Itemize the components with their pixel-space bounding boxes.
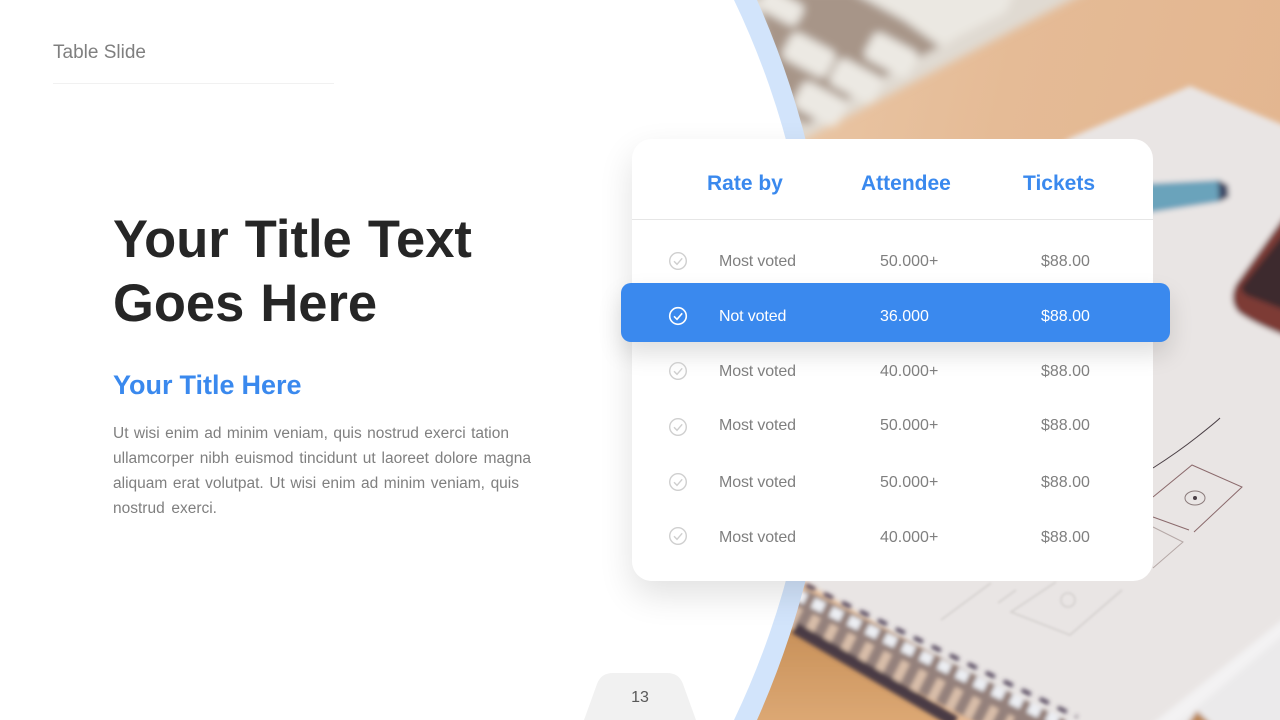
text: $88.00 <box>1041 417 1090 434</box>
text: Attendee <box>861 172 951 195</box>
phone <box>1232 208 1280 338</box>
body paragraph <box>113 425 531 517</box>
page number: 13 <box>631 689 649 706</box>
row 2 text: Not voted <box>719 308 786 325</box>
wireframe sketches on paper <box>941 418 1242 635</box>
text: $88.00 <box>1041 363 1090 380</box>
row 5 text: Most voted <box>719 474 796 491</box>
text: 36.000 <box>880 308 929 325</box>
table card <box>632 139 1153 581</box>
page number tab <box>584 673 696 720</box>
text: 40.000+ <box>880 529 938 546</box>
keyboard <box>720 0 1090 175</box>
body paragraph: Ut wisi enim ad minim veniam, quis nostrud exerci tation <box>113 425 509 442</box>
row 3 text: Most voted <box>719 363 796 380</box>
row 1 icon <box>669 252 687 270</box>
body paragraph: nostrud exerci. <box>113 500 217 517</box>
wood lower left <box>730 610 960 720</box>
table headers: Rate by <box>707 172 783 195</box>
row 6 icon <box>669 527 687 545</box>
text: $88.00 <box>1041 529 1090 546</box>
main title <box>113 210 472 333</box>
text: 40.000+ <box>880 363 938 380</box>
row 6 text: Most voted <box>719 529 796 546</box>
row 2 icon <box>668 306 688 326</box>
table card shadow <box>622 160 806 604</box>
table header divider <box>632 139 1153 220</box>
body paragraph: ullamcorper nibh euismod tincidunt ut laoreet dolore magna <box>113 450 531 467</box>
main title: Goes Here <box>113 274 377 333</box>
marker pen <box>1140 180 1228 214</box>
text: $88.00 <box>1041 308 1090 325</box>
text: $88.00 <box>1041 253 1090 270</box>
text: $88.00 <box>1041 474 1090 491</box>
highlighted row <box>621 283 1170 342</box>
text: Tickets <box>1023 172 1095 195</box>
row 4 icon <box>669 418 687 436</box>
body paragraph: aliquam erat volutpat. Ut wisi enim ad minim veniam, quis <box>113 475 519 492</box>
main title: Your Title Text <box>113 210 472 269</box>
subtitle: Your Title Here <box>113 370 302 400</box>
text: 50.000+ <box>880 253 938 270</box>
notebook spiral <box>785 585 1085 720</box>
row 1 text: Most voted <box>719 253 796 270</box>
text: 50.000+ <box>880 474 938 491</box>
row 5 icon <box>669 473 687 491</box>
page label: Table Slide <box>53 42 146 63</box>
white curved panel <box>0 0 816 720</box>
paper sheet <box>730 86 1280 720</box>
row 4 text: Most voted <box>719 417 796 434</box>
text: 50.000+ <box>880 417 938 434</box>
row 3 icon <box>669 362 687 380</box>
